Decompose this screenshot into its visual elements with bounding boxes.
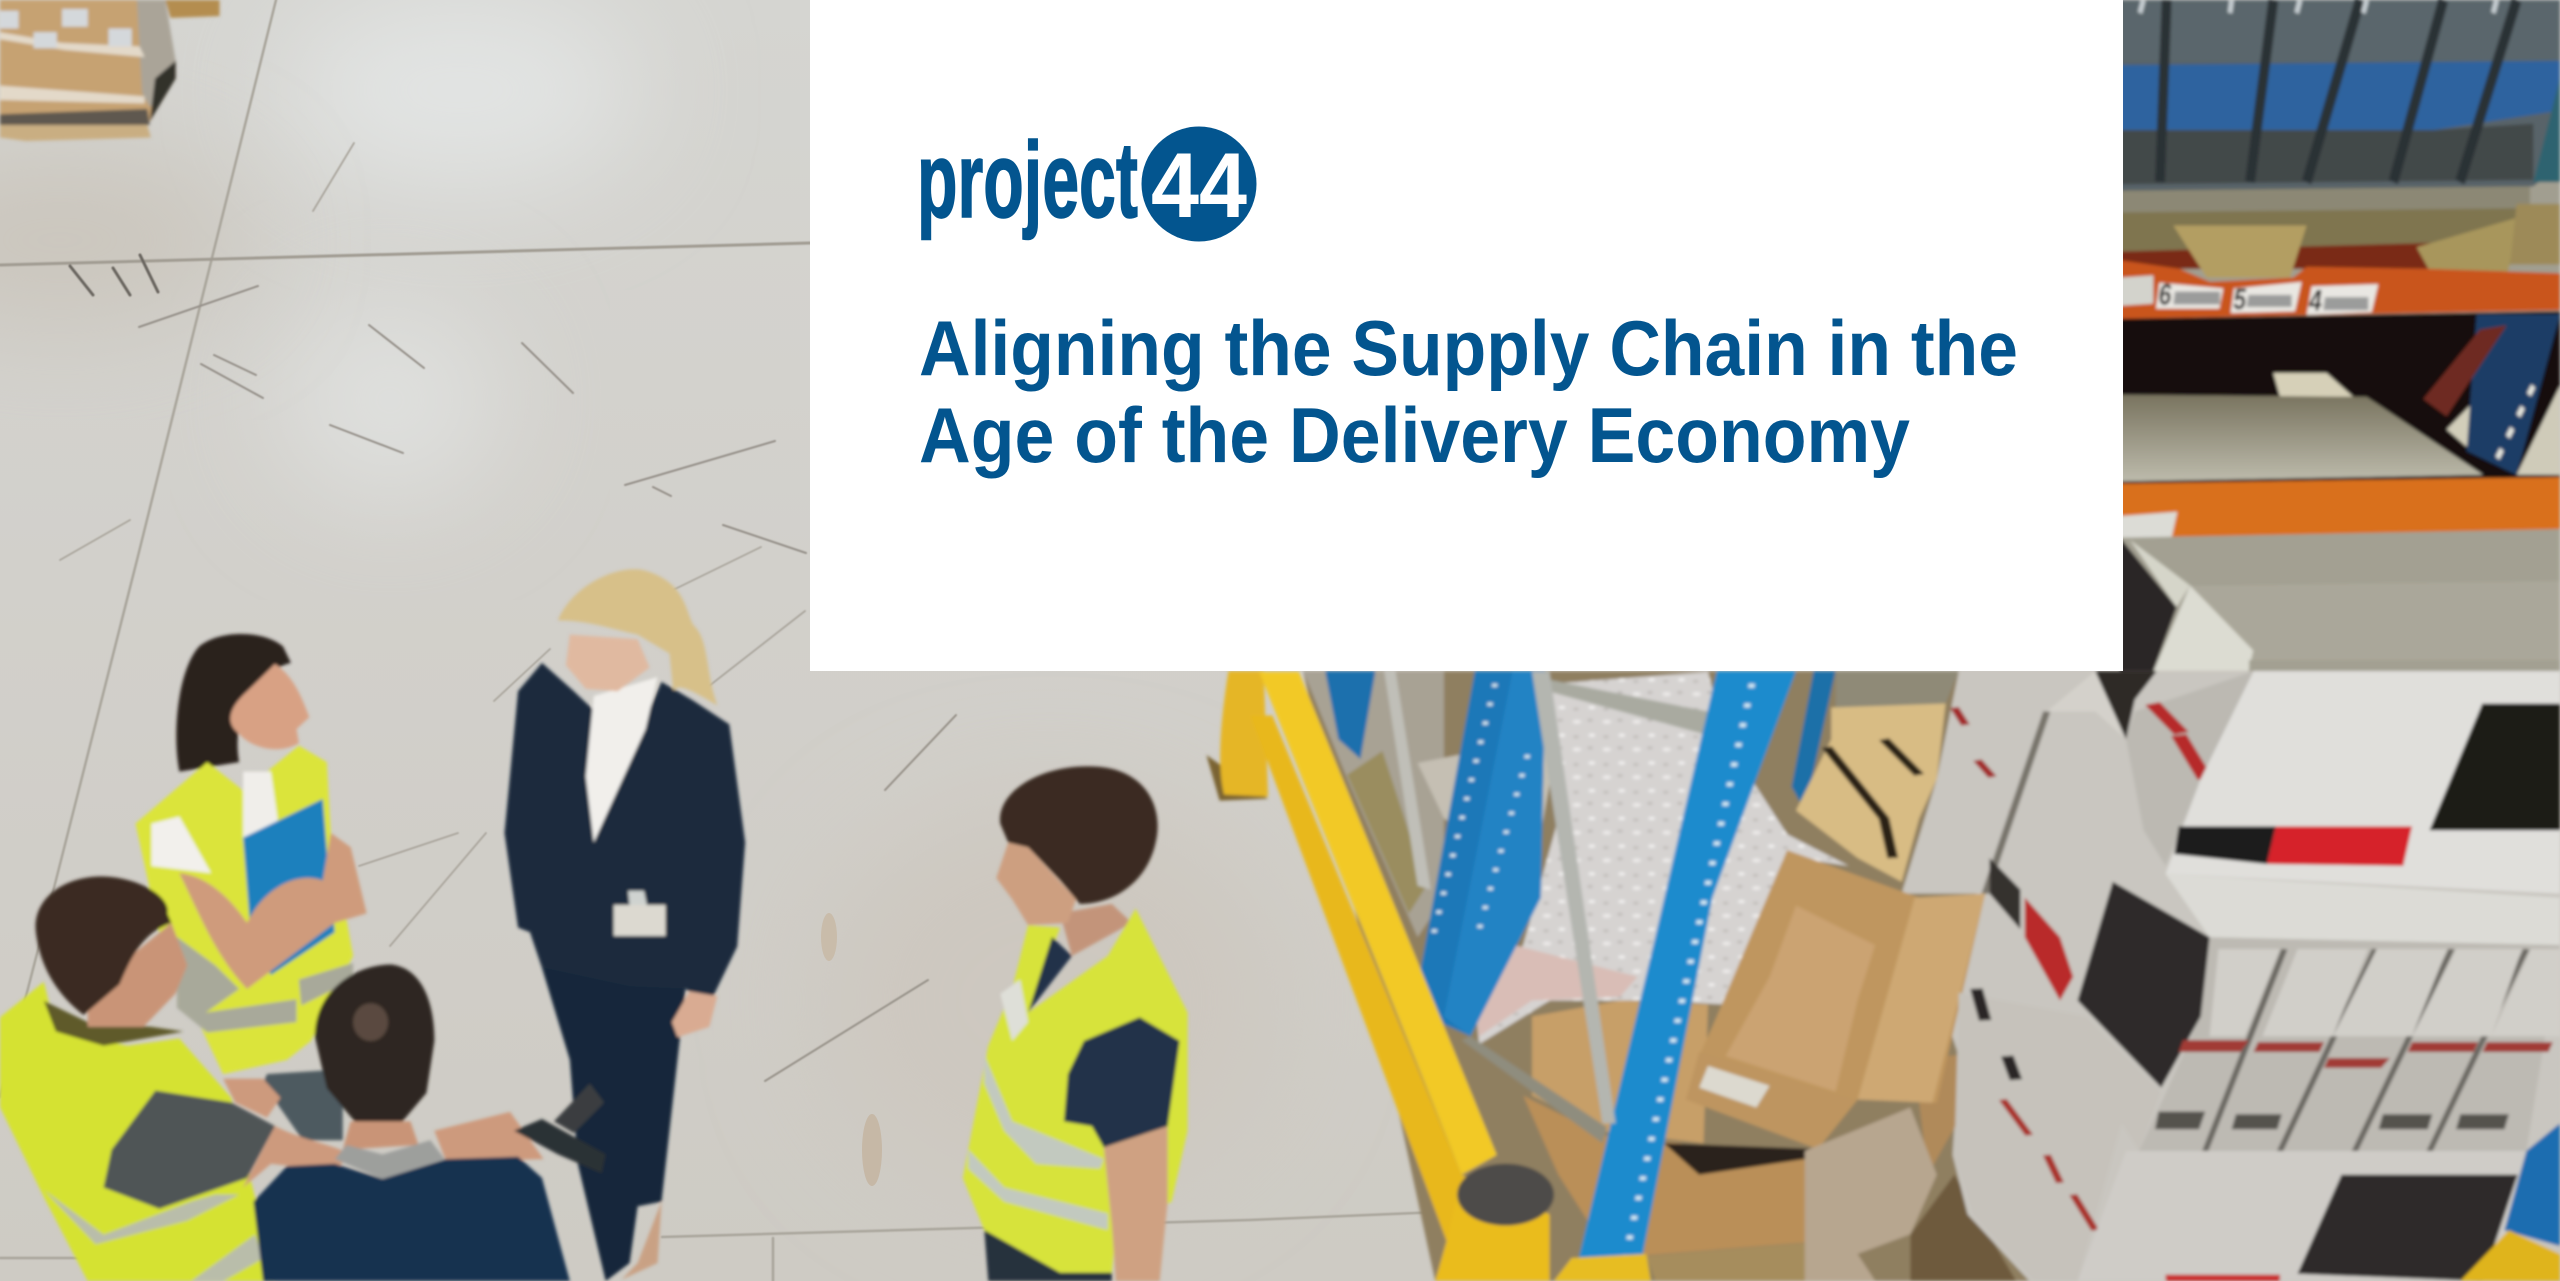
silver diagonal strut xyxy=(1462,672,1616,1143)
orange shelf beam with bay labels: 6 xyxy=(2159,278,2172,311)
gray rack backdrop xyxy=(1303,671,1959,937)
lower racking, cardboard and stacked boxes xyxy=(1206,660,2560,1281)
open cardboard box xyxy=(1686,850,1998,1175)
bottom large box xyxy=(2078,1151,2531,1281)
stacked white boxes base xyxy=(1902,671,2560,1281)
wooden pallets xyxy=(2120,186,2560,278)
silver cross bracing xyxy=(1384,671,1708,890)
wooden pallet xyxy=(1796,704,1946,882)
cardboard pile xyxy=(1523,1001,1818,1256)
cardboard pallet top left xyxy=(0,0,220,141)
blue rack uprights xyxy=(1325,671,1836,1036)
stacked boxes on upper shelf xyxy=(2120,395,2483,481)
plastic wrapped bag xyxy=(1805,1107,1937,1281)
bottom right rack foot xyxy=(2460,1123,2560,1281)
large top box with red label xyxy=(2166,671,2560,894)
woman in dark suit xyxy=(505,569,745,1281)
man with beard xyxy=(0,876,351,1281)
bubble wrap behind uprights xyxy=(1418,672,1849,1044)
row of small boxes with barcodes xyxy=(2078,874,2560,1151)
man with curly hair xyxy=(963,766,1188,1281)
floor pallet slats xyxy=(1646,1175,2016,1281)
project44 logo: project xyxy=(917,119,1138,240)
title xyxy=(919,304,2018,479)
title: Age of the Delivery Economy xyxy=(919,391,1910,479)
upper racks with pallets and orange beams xyxy=(2120,0,2560,680)
orange shelf beam with bay labels: 4 xyxy=(2308,284,2322,317)
white title panel xyxy=(810,0,2123,671)
orange lower beam xyxy=(2120,477,2560,538)
main blue upright xyxy=(1554,671,1796,1281)
shrink-wrapped bottles xyxy=(2120,0,2560,193)
orange shelf beam with bay labels xyxy=(2120,260,2560,319)
people group xyxy=(0,569,1188,1281)
lower left box stack xyxy=(1954,989,2161,1281)
man seen from behind with scanner xyxy=(253,964,606,1281)
yellow safety post and guard rail xyxy=(1206,671,1554,1281)
dark shelf gap and blue rack xyxy=(2120,311,2560,484)
woman with clipboard xyxy=(135,634,367,1140)
orange shelf beam with bay labels: 5 xyxy=(2233,282,2246,316)
project44 logo: 44 xyxy=(1151,135,1247,237)
boxes below lower beam xyxy=(2120,529,2560,680)
title: Aligning the Supply Chain in the xyxy=(919,304,2018,392)
